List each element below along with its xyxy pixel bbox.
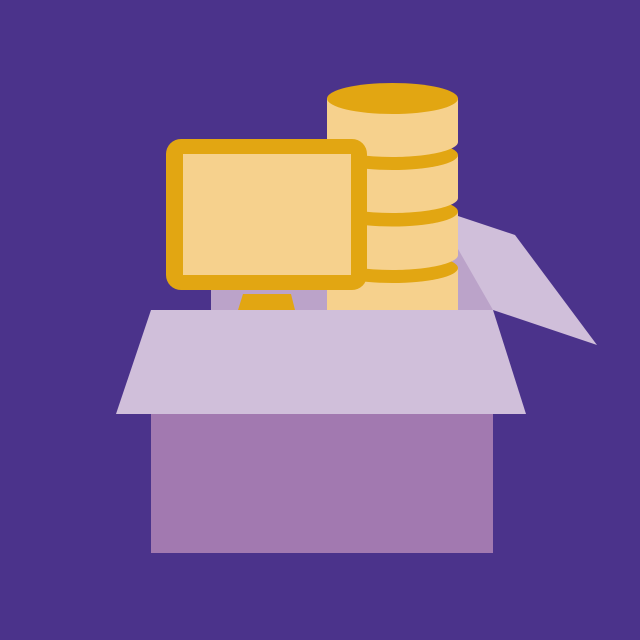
database ring 3 <box>327 253 458 283</box>
monitor stand <box>238 294 295 310</box>
monitor frame <box>166 139 367 290</box>
database ring 1 <box>327 140 458 170</box>
database ring 2 <box>327 196 458 226</box>
icon: monitor <box>166 139 367 310</box>
database segment 3 <box>327 212 458 270</box>
database segment 2 <box>327 155 458 213</box>
box interior back wall <box>211 245 493 310</box>
database segment 1 <box>327 98 458 157</box>
icon: database cylinder <box>327 83 458 310</box>
box front face <box>151 413 493 553</box>
box right flap <box>458 216 597 345</box>
box front flap <box>116 310 526 414</box>
database bottom segment <box>327 268 458 310</box>
database top cap <box>327 83 458 114</box>
monitor screen <box>183 154 351 275</box>
